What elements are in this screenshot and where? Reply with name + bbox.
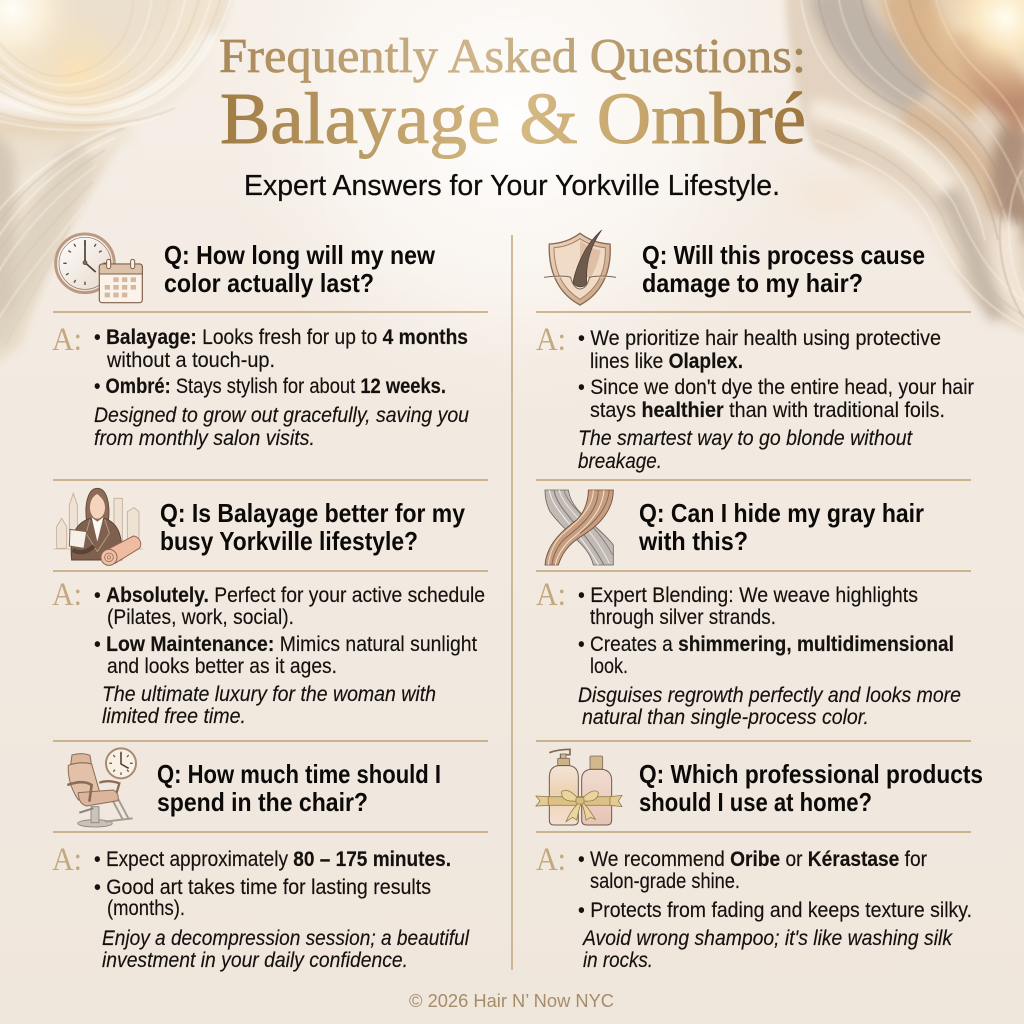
answer bullets xyxy=(578,327,974,422)
answer marker: A: xyxy=(52,577,82,613)
question heading: Q: Can I hide my gray hair xyxy=(639,498,924,528)
answer marker: A: xyxy=(52,322,82,358)
answer marker: A: xyxy=(536,577,566,613)
panel: hair damage xyxy=(536,230,974,473)
question heading: with this? xyxy=(638,526,748,556)
subtitle: Expert Answers for Your Yorkville Lifestyle. xyxy=(244,170,780,202)
answer note: from monthly salon visits. xyxy=(94,427,315,450)
footer: © 2026 Hair N’ Now NYC xyxy=(409,991,614,1011)
question heading: Q: Is Balayage better for my xyxy=(160,498,465,528)
question heading: damage to my hair? xyxy=(642,268,863,298)
question heading xyxy=(642,240,925,298)
hair: left flowing strands xyxy=(0,0,232,370)
question heading xyxy=(164,240,436,298)
answer bullets xyxy=(578,848,972,922)
answer bullets: • Protects from fading and keeps texture silky. xyxy=(578,899,972,922)
icon: salon chair and clock xyxy=(67,748,136,827)
question heading: spend in the chair? xyxy=(157,787,368,817)
answer note: limited free time. xyxy=(102,705,246,728)
icon: twisted strands xyxy=(545,490,613,565)
answer bullets xyxy=(578,584,954,678)
answer bullets: stays healthier than with traditional foils. xyxy=(590,399,945,422)
answer note: Designed to grow out gracefully, saving you xyxy=(94,404,469,427)
answer note: Enjoy a decompression session; a beautiful xyxy=(102,927,470,950)
center glow xyxy=(200,0,824,430)
icon: shield with hair follicle xyxy=(544,230,616,305)
answer bullets: lines like Olaplex. xyxy=(590,350,743,373)
question heading xyxy=(157,759,441,817)
answer note xyxy=(581,927,953,972)
question heading: color actually last? xyxy=(164,268,374,298)
answer note: in rocks. xyxy=(583,949,653,972)
answer marker: A: xyxy=(536,322,566,358)
answer bullets: • We prioritize hair health using protective xyxy=(578,327,941,350)
title line 1: Frequently Asked Questions: xyxy=(219,28,806,83)
answer note xyxy=(94,404,469,450)
answer bullets xyxy=(94,326,468,398)
answer bullets: • Since we don't dye the entire head, your hair xyxy=(578,376,974,399)
title xyxy=(219,28,806,159)
question heading: Q: Which professional products xyxy=(639,759,983,789)
icon: clock and calendar xyxy=(56,234,142,303)
panel: gray hair xyxy=(536,490,971,729)
question heading: busy Yorkville lifestyle? xyxy=(160,526,418,556)
answer note: Avoid wrong shampoo; it's like washing silk xyxy=(581,927,953,950)
panel: how long will color last xyxy=(52,234,488,450)
question heading: Q: How much time should I xyxy=(157,759,441,789)
answer bullets: without a touch-up. xyxy=(106,349,275,372)
answer bullets: through silver strands. xyxy=(590,606,776,629)
answer note xyxy=(102,927,470,972)
panel: busy Yorkville lifestyle xyxy=(52,488,488,728)
answer bullets: (months). xyxy=(107,897,185,920)
panel: time in the chair xyxy=(52,748,488,972)
answer bullets: and looks better as it ages. xyxy=(107,655,337,678)
answer note: The smartest way to go blonde without xyxy=(578,427,913,450)
answer bullets: look. xyxy=(590,655,628,678)
question heading xyxy=(638,498,924,556)
answer bullets xyxy=(94,584,485,678)
answer marker: A: xyxy=(52,842,82,878)
answer bullets: • Creates a shimmering, multidimensional xyxy=(578,633,954,656)
answer note: breakage. xyxy=(578,450,662,473)
answer note: Disguises regrowth perfectly and looks more xyxy=(578,684,961,707)
panel: home products xyxy=(536,749,983,972)
answer note: natural than single-process color. xyxy=(582,706,869,729)
answer bullets: • Good art takes time for lasting results xyxy=(94,876,431,899)
answer bullets: • Expert Blending: We weave highlights xyxy=(578,584,918,607)
answer bullets: (Pilates, work, social). xyxy=(107,606,294,629)
question heading: Q: How long will my new xyxy=(164,240,436,270)
answer bullets: • Low Maintenance: Mimics natural sunlight xyxy=(94,633,477,656)
answer note xyxy=(578,427,913,473)
answer note: investment in your daily confidence. xyxy=(102,949,408,972)
question heading xyxy=(639,759,983,817)
answer bullets: • Absolutely. Perfect for your active schedule xyxy=(94,584,485,607)
hair: right flowing strands xyxy=(785,0,1024,335)
answer bullets: • We recommend Oribe or Kérastase for xyxy=(578,848,927,871)
question heading: Q: Will this process cause xyxy=(642,240,925,270)
answer bullets: salon-grade shine. xyxy=(590,870,740,893)
question heading xyxy=(160,498,465,556)
answer bullets: • Expect approximately 80 – 175 minutes. xyxy=(94,848,451,871)
answer bullets xyxy=(94,848,451,920)
title line 2: Balayage & Ombré xyxy=(220,78,806,159)
answer marker: A: xyxy=(536,842,566,878)
answer note xyxy=(578,684,961,729)
answer note: The ultimate luxury for the woman with xyxy=(102,683,436,706)
answer note xyxy=(102,683,436,728)
question heading: should I use at home? xyxy=(639,787,872,817)
icon: bottles with ribbon xyxy=(536,749,622,825)
icon: businesswoman with yoga mat xyxy=(53,488,143,565)
center vertical divider xyxy=(511,235,513,970)
answer bullets: • Ombré: Stays stylish for about 12 weeks. xyxy=(94,375,446,398)
answer bullets: • Balayage: Looks fresh for up to 4 months xyxy=(94,326,468,349)
